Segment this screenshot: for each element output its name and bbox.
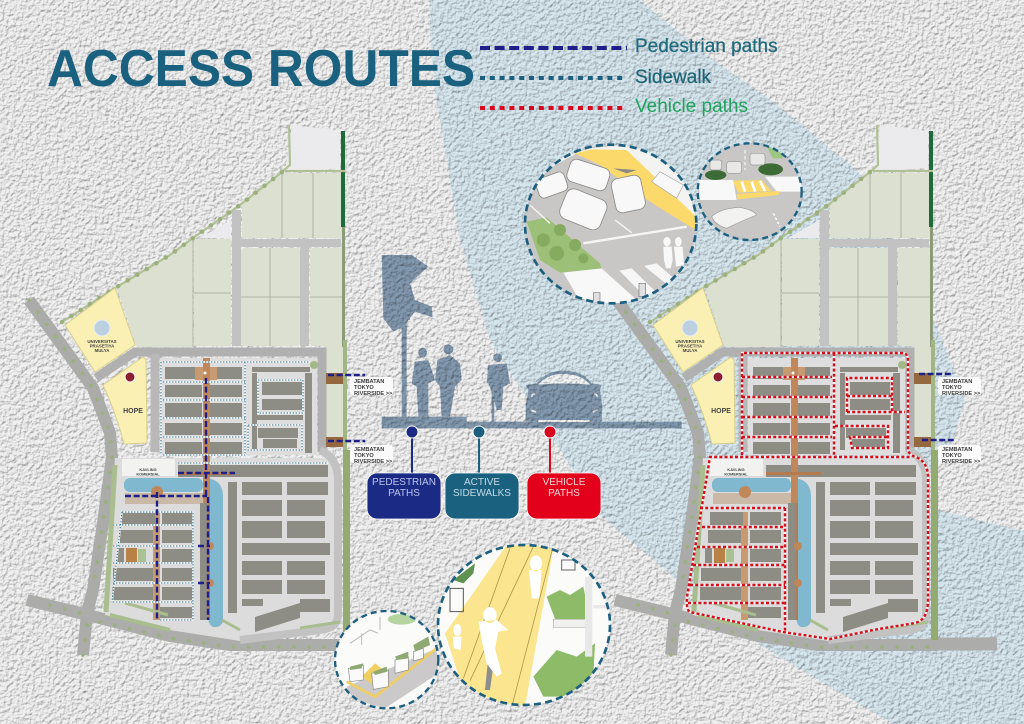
site labels left: UNIVERSITAS (87, 339, 117, 344)
box: pedestrian paths (367, 473, 441, 519)
bridge label lower: TOKYO (354, 453, 374, 459)
site labels left (87, 339, 160, 476)
bridge label upper: TOKYO (942, 385, 962, 391)
bridge label upper: RIVERSIDE >> (354, 391, 393, 397)
site plan: vehicle routes (615, 125, 997, 655)
ground bar (382, 417, 682, 428)
site labels left: KOMERSIAL (136, 472, 160, 476)
illustration: cycle path circle (437, 543, 612, 707)
legend (480, 36, 778, 117)
site labels left: KAVLING (139, 467, 157, 472)
legend: vehicle paths: Vehicle paths (635, 96, 748, 117)
illustration: crossing circle (697, 142, 803, 242)
site plan: pedestrian and sidewalk routes (27, 125, 393, 655)
site labels right: HOPE (711, 408, 731, 415)
tree silhouette (382, 255, 433, 332)
box: active sidewalks: SIDEWALKS (453, 488, 511, 499)
marker: sidewalk (473, 426, 485, 475)
box: pedestrian paths: PATHS (388, 488, 420, 499)
site labels right: UNIVERSITAS (675, 339, 705, 344)
site labels right: MULYA (683, 348, 698, 353)
bridge label lower: JEMBATAN (942, 447, 972, 453)
street lamp (398, 313, 410, 417)
street section callouts (367, 426, 601, 519)
marker: vehicle (544, 426, 556, 475)
site labels right: PRASETIYA (678, 344, 703, 348)
illustration: parking street circle (520, 140, 703, 310)
site plan base right (615, 125, 981, 655)
background: blue wave shape upper (430, 0, 965, 645)
street section silhouette (382, 255, 682, 428)
illustration: planters circle (333, 610, 440, 710)
bridge dashes (919, 374, 955, 440)
site labels right: KAVLING (727, 467, 745, 472)
site labels left: HOPE (123, 408, 143, 415)
legend: sidewalk: Sidewalk (635, 67, 712, 88)
marker: pedestrian (406, 426, 418, 475)
box: vehicle paths: PATHS (548, 488, 580, 499)
bridge label lower: JEMBATAN (354, 447, 384, 453)
bridge label upper: JEMBATAN (942, 379, 972, 385)
pedestrian routes (125, 375, 365, 620)
site labels right (675, 339, 748, 476)
cyclist (487, 353, 510, 422)
site labels right: KOMERSIAL (724, 472, 748, 476)
bridge label lower: RIVERSIDE >> (354, 459, 393, 465)
sidewalk routes (112, 362, 328, 620)
box: active sidewalks: ACTIVE (464, 477, 500, 488)
box: vehicle paths: VEHICLE (543, 477, 586, 488)
bridge label lower: TOKYO (942, 453, 962, 459)
background: blue wave shape lower (760, 510, 1024, 724)
car (526, 371, 602, 422)
legend: pedestrian paths: Pedestrian paths (635, 36, 778, 57)
site plan base left (27, 125, 393, 655)
site labels left: MULYA (95, 348, 110, 353)
box: active sidewalks (445, 473, 519, 519)
box: pedestrian paths: PEDESTRIAN (372, 477, 436, 488)
box: vehicle paths (527, 473, 601, 519)
site labels left: PRASETIYA (90, 344, 115, 348)
bridge label upper: RIVERSIDE >> (942, 391, 981, 397)
bridge label upper: JEMBATAN (354, 379, 384, 385)
bottom road extension (938, 638, 997, 650)
bridge label upper: TOKYO (354, 385, 374, 391)
title: ACCESS ROUTES (47, 40, 475, 98)
couple walking (412, 344, 462, 417)
vehicle route lines (687, 353, 928, 639)
bridge label lower: RIVERSIDE >> (942, 459, 981, 465)
